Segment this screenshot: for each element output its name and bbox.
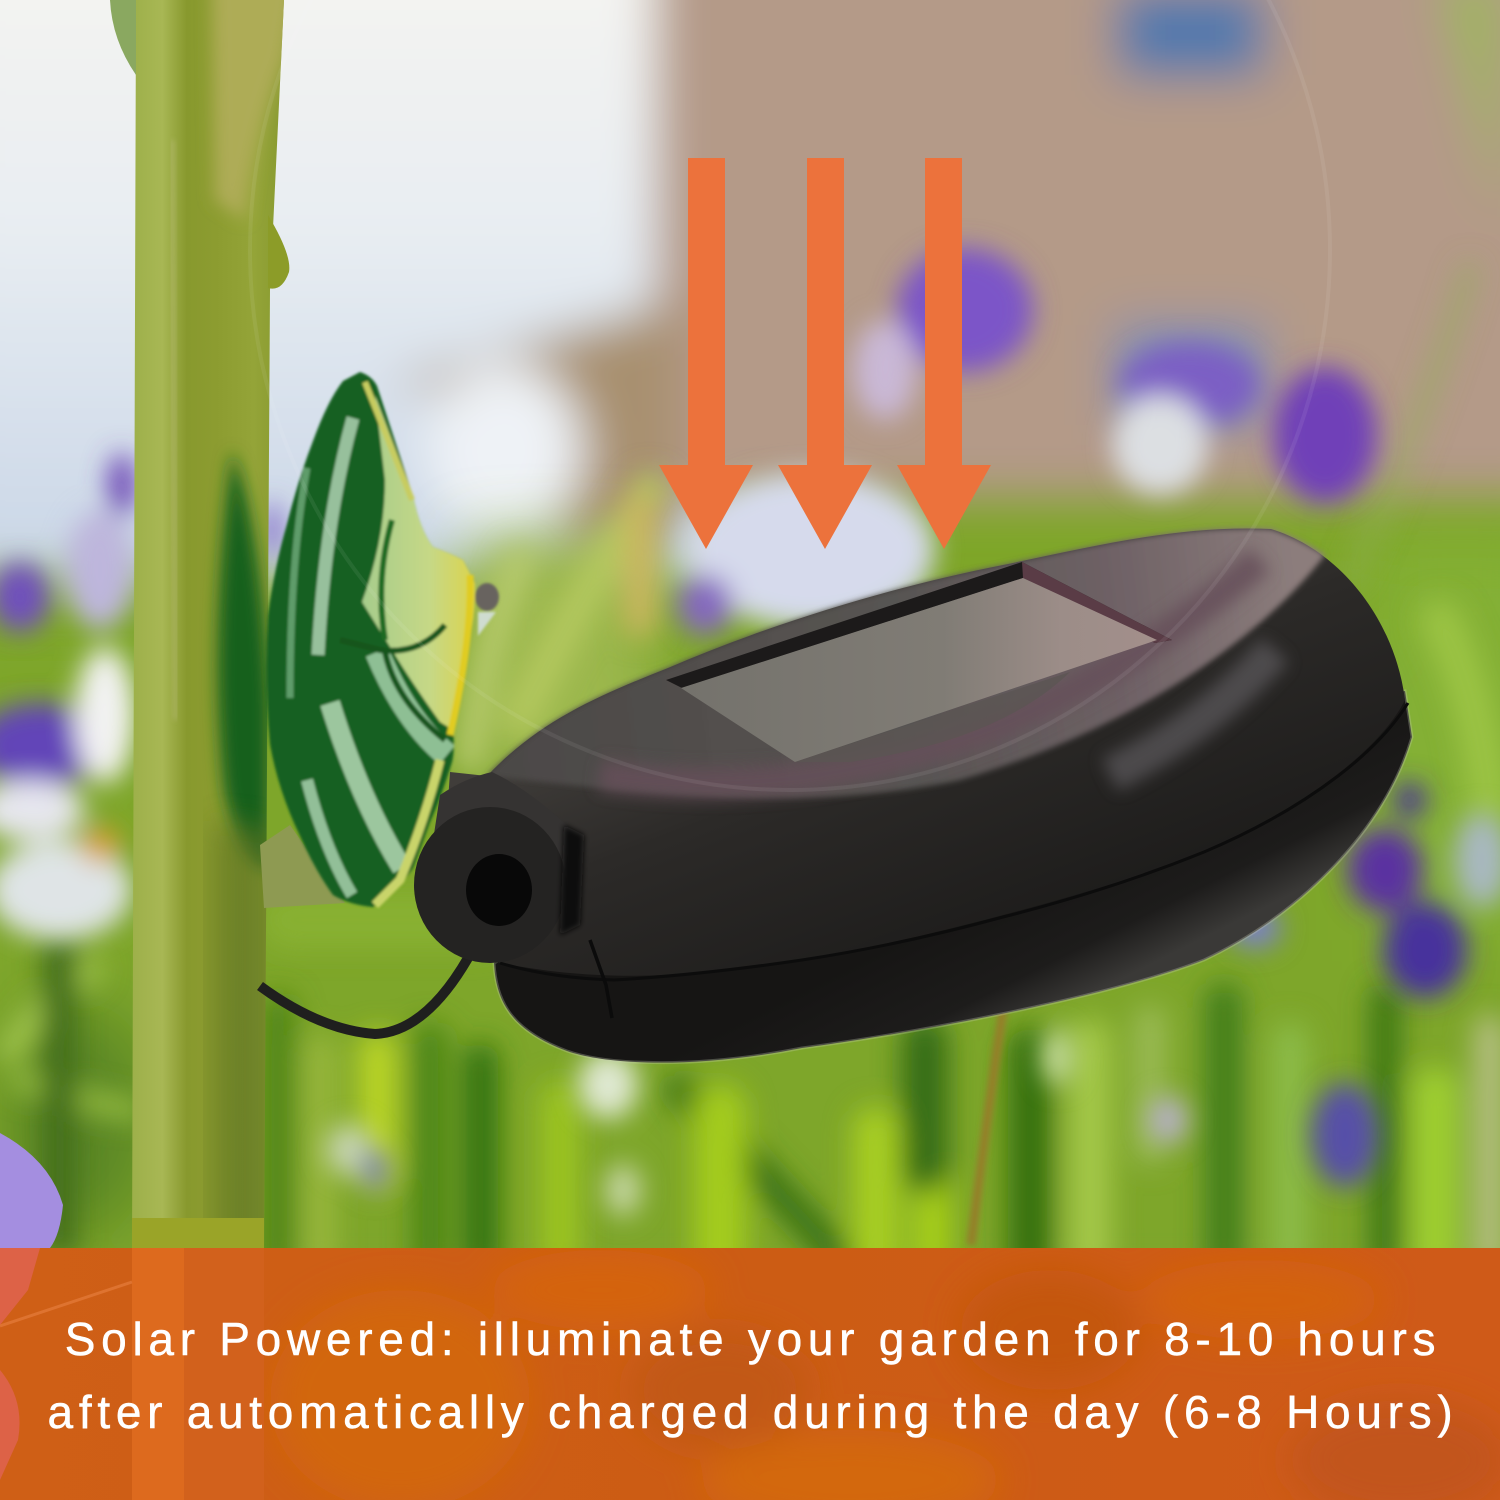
caption line 1: Solar Powered: illuminate your garden for 8-10 hours	[65, 1313, 1441, 1365]
brown grass stalk	[971, 1010, 1003, 1245]
leaf bracket	[260, 825, 345, 908]
flowers	[0, 248, 1500, 1216]
stem and bud	[110, 0, 300, 1260]
arrow 1	[659, 158, 753, 549]
arrow 2	[778, 158, 872, 549]
soft field foliage	[10, 920, 480, 1240]
top face	[487, 528, 1325, 798]
icon: sunlight arrows	[659, 158, 991, 549]
caption line 2: after automatically charged during the day (6-8 Hours)	[48, 1386, 1458, 1438]
bottom banner	[0, 1248, 1500, 1500]
caption text	[48, 1313, 1458, 1438]
knob	[414, 807, 566, 963]
panel shadow sliver	[795, 672, 1070, 762]
unit lower shell	[494, 691, 1412, 1063]
unit top shell	[440, 528, 1405, 976]
stem dark green shade	[218, 450, 270, 870]
stem pale stripe	[172, 140, 176, 720]
grass streaks	[278, 270, 1490, 1260]
arrow 3	[897, 158, 991, 549]
leaf	[266, 372, 499, 907]
neck	[430, 772, 572, 900]
stem upper tan	[206, 0, 284, 220]
pink sheen	[600, 560, 1260, 783]
flower petal	[0, 1133, 63, 1248]
lens flare	[250, 0, 1330, 790]
stem lower shade	[215, 820, 275, 1260]
solar unit	[414, 528, 1412, 1063]
knob hole	[466, 854, 532, 926]
knob shadow	[560, 825, 584, 935]
highlight	[1110, 650, 1275, 775]
wire	[260, 958, 468, 1034]
solar panel groove	[666, 562, 1172, 688]
scuff mark	[590, 940, 612, 1018]
solar panel	[681, 578, 1157, 762]
seam	[500, 703, 1408, 980]
